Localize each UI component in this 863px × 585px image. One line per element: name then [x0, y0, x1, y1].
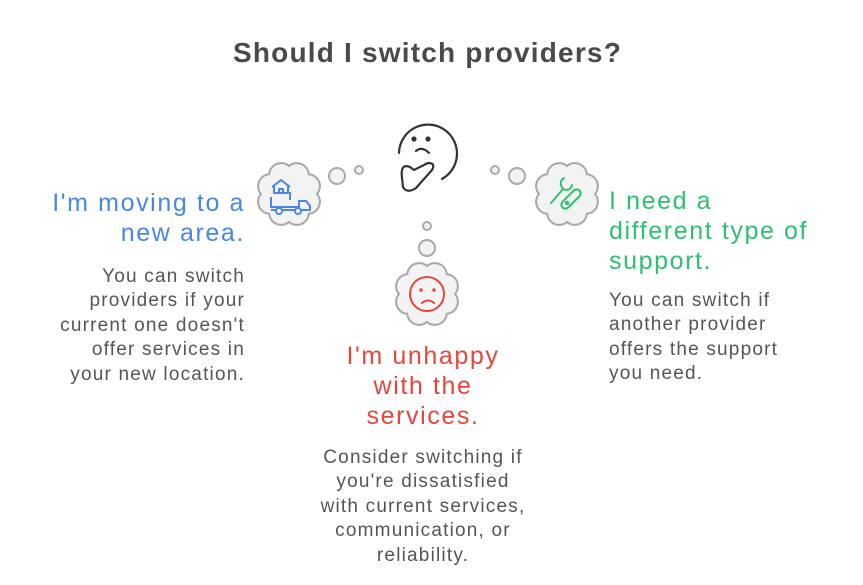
text: unhappy: reliability.: [377, 545, 469, 566]
text: moving: current one doesn't: [60, 315, 245, 336]
icon: tools cloud: [536, 163, 598, 225]
heading: support: [609, 187, 808, 275]
panel: moving: [52, 189, 245, 385]
heading: moving: [52, 189, 245, 247]
text: moving: [60, 266, 245, 385]
text: unhappy: with current services,: [321, 496, 525, 517]
text: unhappy: communication, or: [335, 520, 511, 541]
title: Should I switch providers?: [233, 37, 622, 68]
bubbles: small circles: [329, 166, 525, 256]
text: moving: offer services in: [92, 339, 245, 360]
text: unhappy: Consider switching if: [323, 447, 523, 468]
text: unhappy: you're dissatisfied: [336, 471, 510, 492]
text: support: [609, 290, 778, 384]
heading: unhappy: services.: [366, 402, 480, 430]
text: support: offers the support: [609, 339, 778, 360]
heading: support: different type of: [609, 217, 808, 245]
heading: support: support.: [609, 247, 712, 275]
icon: house truck cloud: [258, 163, 320, 225]
heading: unhappy: [346, 342, 500, 430]
icon: sad face cloud: [396, 263, 458, 325]
text: moving: your new location.: [70, 364, 245, 385]
icon: thinking face: [399, 125, 457, 191]
text: support: You can switch if: [609, 290, 770, 311]
panel: unhappy: [320, 342, 525, 566]
heading: unhappy: I'm unhappy: [346, 342, 500, 370]
text: support: you need.: [609, 363, 703, 384]
text: support: another provider: [609, 314, 767, 335]
text: moving: You can switch: [102, 266, 245, 287]
text: moving: providers if your: [89, 290, 245, 311]
heading: unhappy: with the: [374, 372, 472, 400]
heading: moving: new area.: [121, 219, 245, 247]
panel: support: [609, 187, 808, 384]
heading: support: I need a: [609, 187, 712, 215]
heading: moving: I'm moving to a: [52, 189, 245, 217]
text: unhappy: [320, 447, 525, 566]
